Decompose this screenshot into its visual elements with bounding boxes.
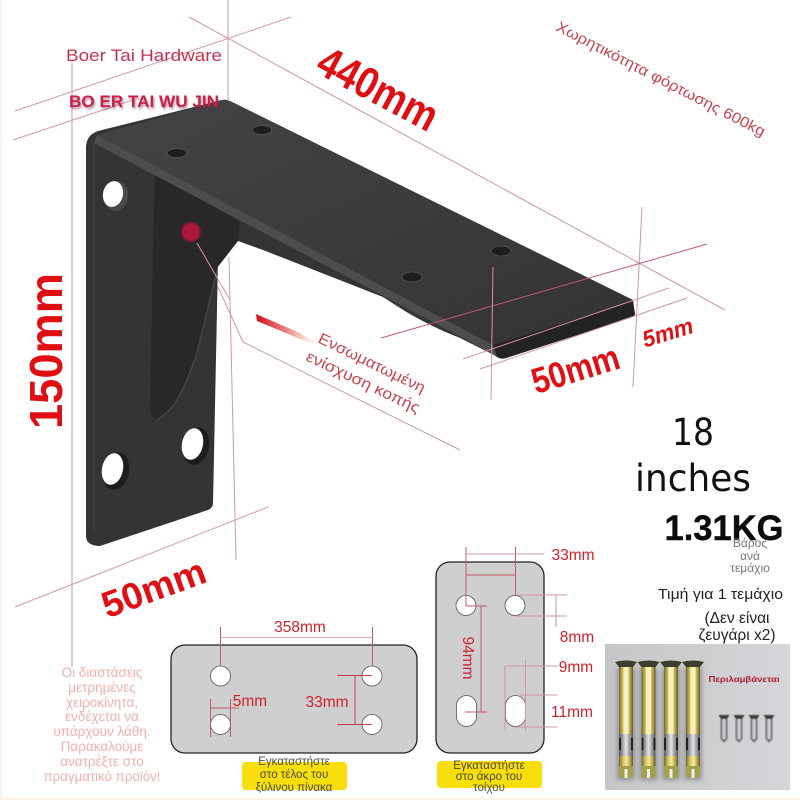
33mm dimension lines xyxy=(466,547,544,606)
photo background xyxy=(605,644,790,790)
disclaimer note: ανατρέξτε στο xyxy=(60,754,144,769)
5mm dimension lines xyxy=(210,699,239,737)
price note xyxy=(658,587,783,644)
9mm dimension lines xyxy=(505,660,558,731)
size: 18 inches xyxy=(635,411,751,500)
plate body xyxy=(171,645,417,753)
plate countersunk holes xyxy=(168,126,511,282)
expansion bolts xyxy=(615,660,704,780)
label 9mm: 9mm xyxy=(559,659,593,676)
panel: horizontal plate diagram xyxy=(171,619,417,753)
callout: built-in reinforcement: ενίσχυση κοπής xyxy=(303,348,423,417)
load capacity note: Χωρητικότητα φόρτωσης 600kg xyxy=(553,18,768,140)
label 5mm: 5mm xyxy=(233,693,267,710)
dimension: 50mm plate width: 50mm xyxy=(526,336,624,402)
size: 18 inches: inches xyxy=(635,457,751,500)
panel: vertical plate diagram xyxy=(436,547,595,753)
bracket illustration xyxy=(86,100,635,546)
yellow caption: wall edge: Εγκαταστήστε xyxy=(453,760,525,772)
disclaimer note: Παρακαλούμε xyxy=(61,739,143,754)
label 11mm: 11mm xyxy=(551,704,593,721)
33mm dimension lines xyxy=(337,675,372,724)
yellow caption: wall edge: τοίχου xyxy=(473,782,505,794)
disclaimer note: μετρημένες xyxy=(68,680,136,695)
top plate surface xyxy=(97,100,633,345)
callout: built-in reinforcement xyxy=(303,330,428,417)
callout arrow wedge xyxy=(256,314,319,345)
disclaimer note: Οι διαστάσεις xyxy=(62,665,143,680)
disclaimer note: χειροκίνητα, xyxy=(66,695,138,710)
yellow caption: wood board end: στο τέλος του xyxy=(260,769,328,781)
8mm dimension lines xyxy=(515,595,567,627)
brand: Boer Tai Hardware: Boer Tai Hardware xyxy=(66,46,222,65)
front edge thickness xyxy=(493,302,635,359)
label 94mm: 94mm xyxy=(459,636,476,680)
plate holes xyxy=(210,666,382,734)
upright mounting holes xyxy=(99,179,213,492)
callout: built-in reinforcement: Ενσωματωμένη xyxy=(315,330,428,397)
brand: BO ER TAI WU JIN: BO ER TAI WU JIN xyxy=(69,92,219,111)
yellow caption: wall edge xyxy=(437,760,542,794)
dimension: 5mm thickness: 5mm xyxy=(639,312,696,352)
label 33mm: 33mm xyxy=(551,547,595,564)
label: included: Περιλαμβάνεται xyxy=(708,674,780,684)
label 358mm: 358mm xyxy=(274,619,326,636)
disclaimer note xyxy=(44,665,160,784)
wood screws xyxy=(718,715,774,743)
weight caption: τεμάχιο xyxy=(730,561,770,575)
358mm dimension lines xyxy=(220,627,372,666)
bracket silhouette xyxy=(86,100,635,546)
weight: 1.31KG: 1.31KG xyxy=(664,509,784,548)
weight caption xyxy=(730,536,770,575)
yellow caption: wall edge: στο άκρο του xyxy=(456,771,522,783)
price note: (Δεν είναι xyxy=(704,610,770,627)
disclaimer note: ενδέχεται να xyxy=(65,709,139,724)
plate body xyxy=(436,562,544,753)
yellow caption: wood board end: ξύλινου πίνακα xyxy=(256,782,333,794)
size: 18 inches: 18 xyxy=(672,411,714,454)
price note: ζευγάρι x2) xyxy=(698,627,776,644)
94mm dimension lines xyxy=(465,606,487,712)
11mm dimension lines xyxy=(515,695,557,727)
label 33mm: 33mm xyxy=(305,694,349,711)
side edge strip xyxy=(94,135,497,356)
reinforcing rib xyxy=(150,173,240,420)
price note: Τιμή για 1 τεμάχιο xyxy=(658,587,783,603)
dimension: 50mm bottom: 50mm xyxy=(96,551,211,626)
disclaimer note: πραγματικό προϊόν! xyxy=(44,769,160,784)
dimension: 440mm: 440mm xyxy=(309,37,447,141)
red marker dot xyxy=(182,222,200,242)
rib highlight edge xyxy=(157,270,217,420)
plate holes and slots xyxy=(456,596,526,726)
weight caption: ανά xyxy=(740,549,760,563)
weight caption: Βάρος xyxy=(733,536,767,550)
yellow caption: wood board end xyxy=(242,756,347,794)
disclaimer note: υπάρχουν λάθη. xyxy=(53,724,151,739)
dimension guide lines xyxy=(13,0,725,667)
dimension: 150mm: 150mm xyxy=(20,273,72,429)
label 8mm: 8mm xyxy=(560,629,594,646)
panel: included hardware photo xyxy=(605,644,790,790)
yellow caption: wood board end: Εγκαταστήστε xyxy=(258,756,330,768)
inner flange edge xyxy=(93,143,95,532)
